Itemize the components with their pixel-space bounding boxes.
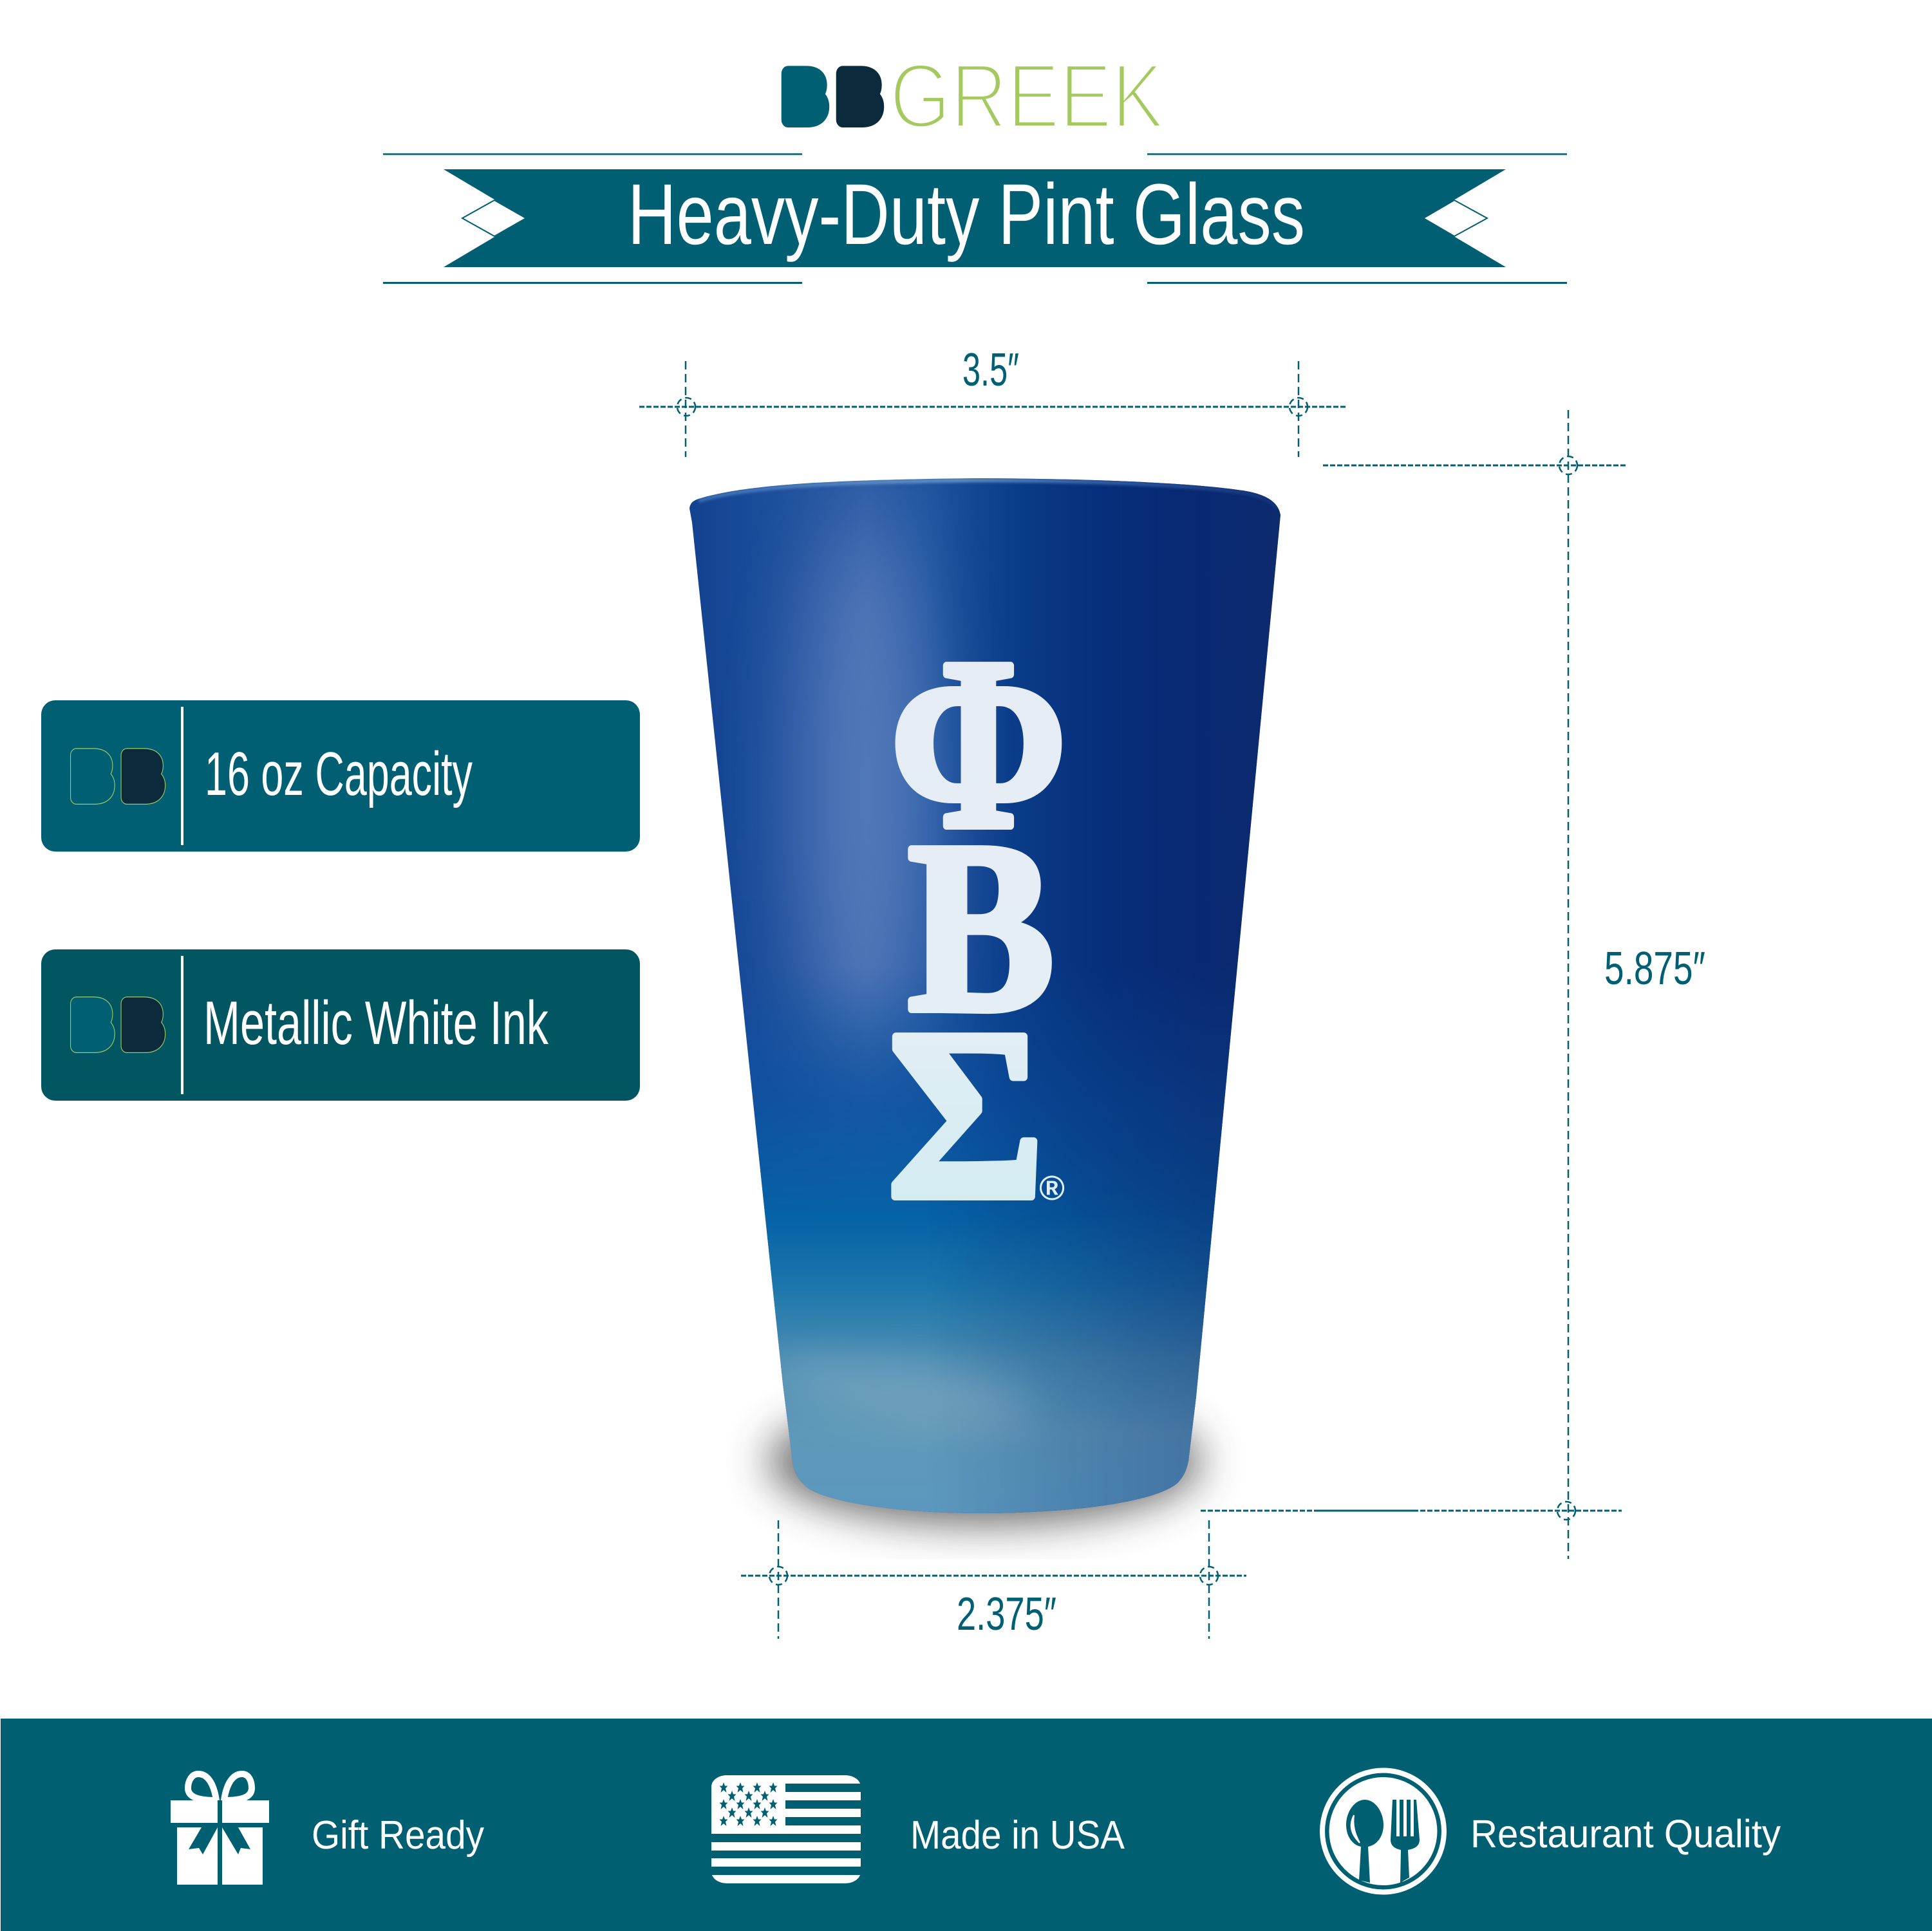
- dimension: height: [1201, 410, 1705, 1559]
- dimension: base width: [741, 1520, 1246, 1640]
- icon: restaurant plate: [1322, 1770, 1444, 1892]
- icon: gift: [171, 1774, 269, 1885]
- pint glass: [682, 470, 1288, 1519]
- label: gift ready: Gift Ready: [312, 1813, 484, 1858]
- logo: BBGREEK: B: [839, 60, 880, 135]
- logo: BBGREEK: [784, 45, 1164, 147]
- label: restaurant quality: Restaurant Quality: [1470, 1812, 1781, 1856]
- label: 2.375 inches: 2.375″: [957, 1589, 1056, 1640]
- footer band: [1, 1719, 1932, 1931]
- card text: Metallic White Ink: [203, 989, 549, 1058]
- card text: 16 oz Capacity: [205, 740, 473, 808]
- card logo mark: B: [73, 742, 111, 811]
- label: 5.875 inches: 5.875″: [1604, 943, 1705, 994]
- icon: us flag: [711, 1775, 861, 1883]
- card: 16 oz capacity: [41, 700, 640, 852]
- card logo mark: B: [73, 742, 111, 811]
- logo: BBGREEK: GREEK: [890, 45, 1164, 147]
- card logo mark: B: [73, 991, 111, 1059]
- card logo mark: B: [124, 991, 162, 1059]
- fraternity letters: [887, 608, 1067, 1250]
- glass shadow: [769, 1400, 1201, 1522]
- dimension: top width: [639, 344, 1346, 457]
- spoon: [1346, 1800, 1383, 1883]
- label: made in usa: Made in USA: [910, 1813, 1125, 1858]
- title ribbon: [383, 153, 1567, 284]
- card logo mark: B: [124, 742, 162, 811]
- registered mark: ®: [1039, 1169, 1065, 1208]
- fraternity letters: Β: [908, 792, 1055, 1063]
- fraternity letters: Σ: [887, 979, 1045, 1250]
- card logo mark: B: [124, 742, 162, 811]
- card logo mark: [73, 991, 162, 1059]
- card logo mark: B: [124, 991, 162, 1059]
- logo: BBGREEK: B: [784, 60, 825, 135]
- label: 3.5 inches: 3.5″: [962, 344, 1019, 396]
- fraternity letters: Φ: [890, 608, 1067, 879]
- card: metallic white ink: [41, 949, 640, 1101]
- card logo mark: B: [73, 991, 111, 1059]
- card logo mark: [73, 742, 162, 811]
- fork: [1391, 1800, 1420, 1883]
- title text: Heavy-Duty Pint Glass: [628, 167, 1305, 263]
